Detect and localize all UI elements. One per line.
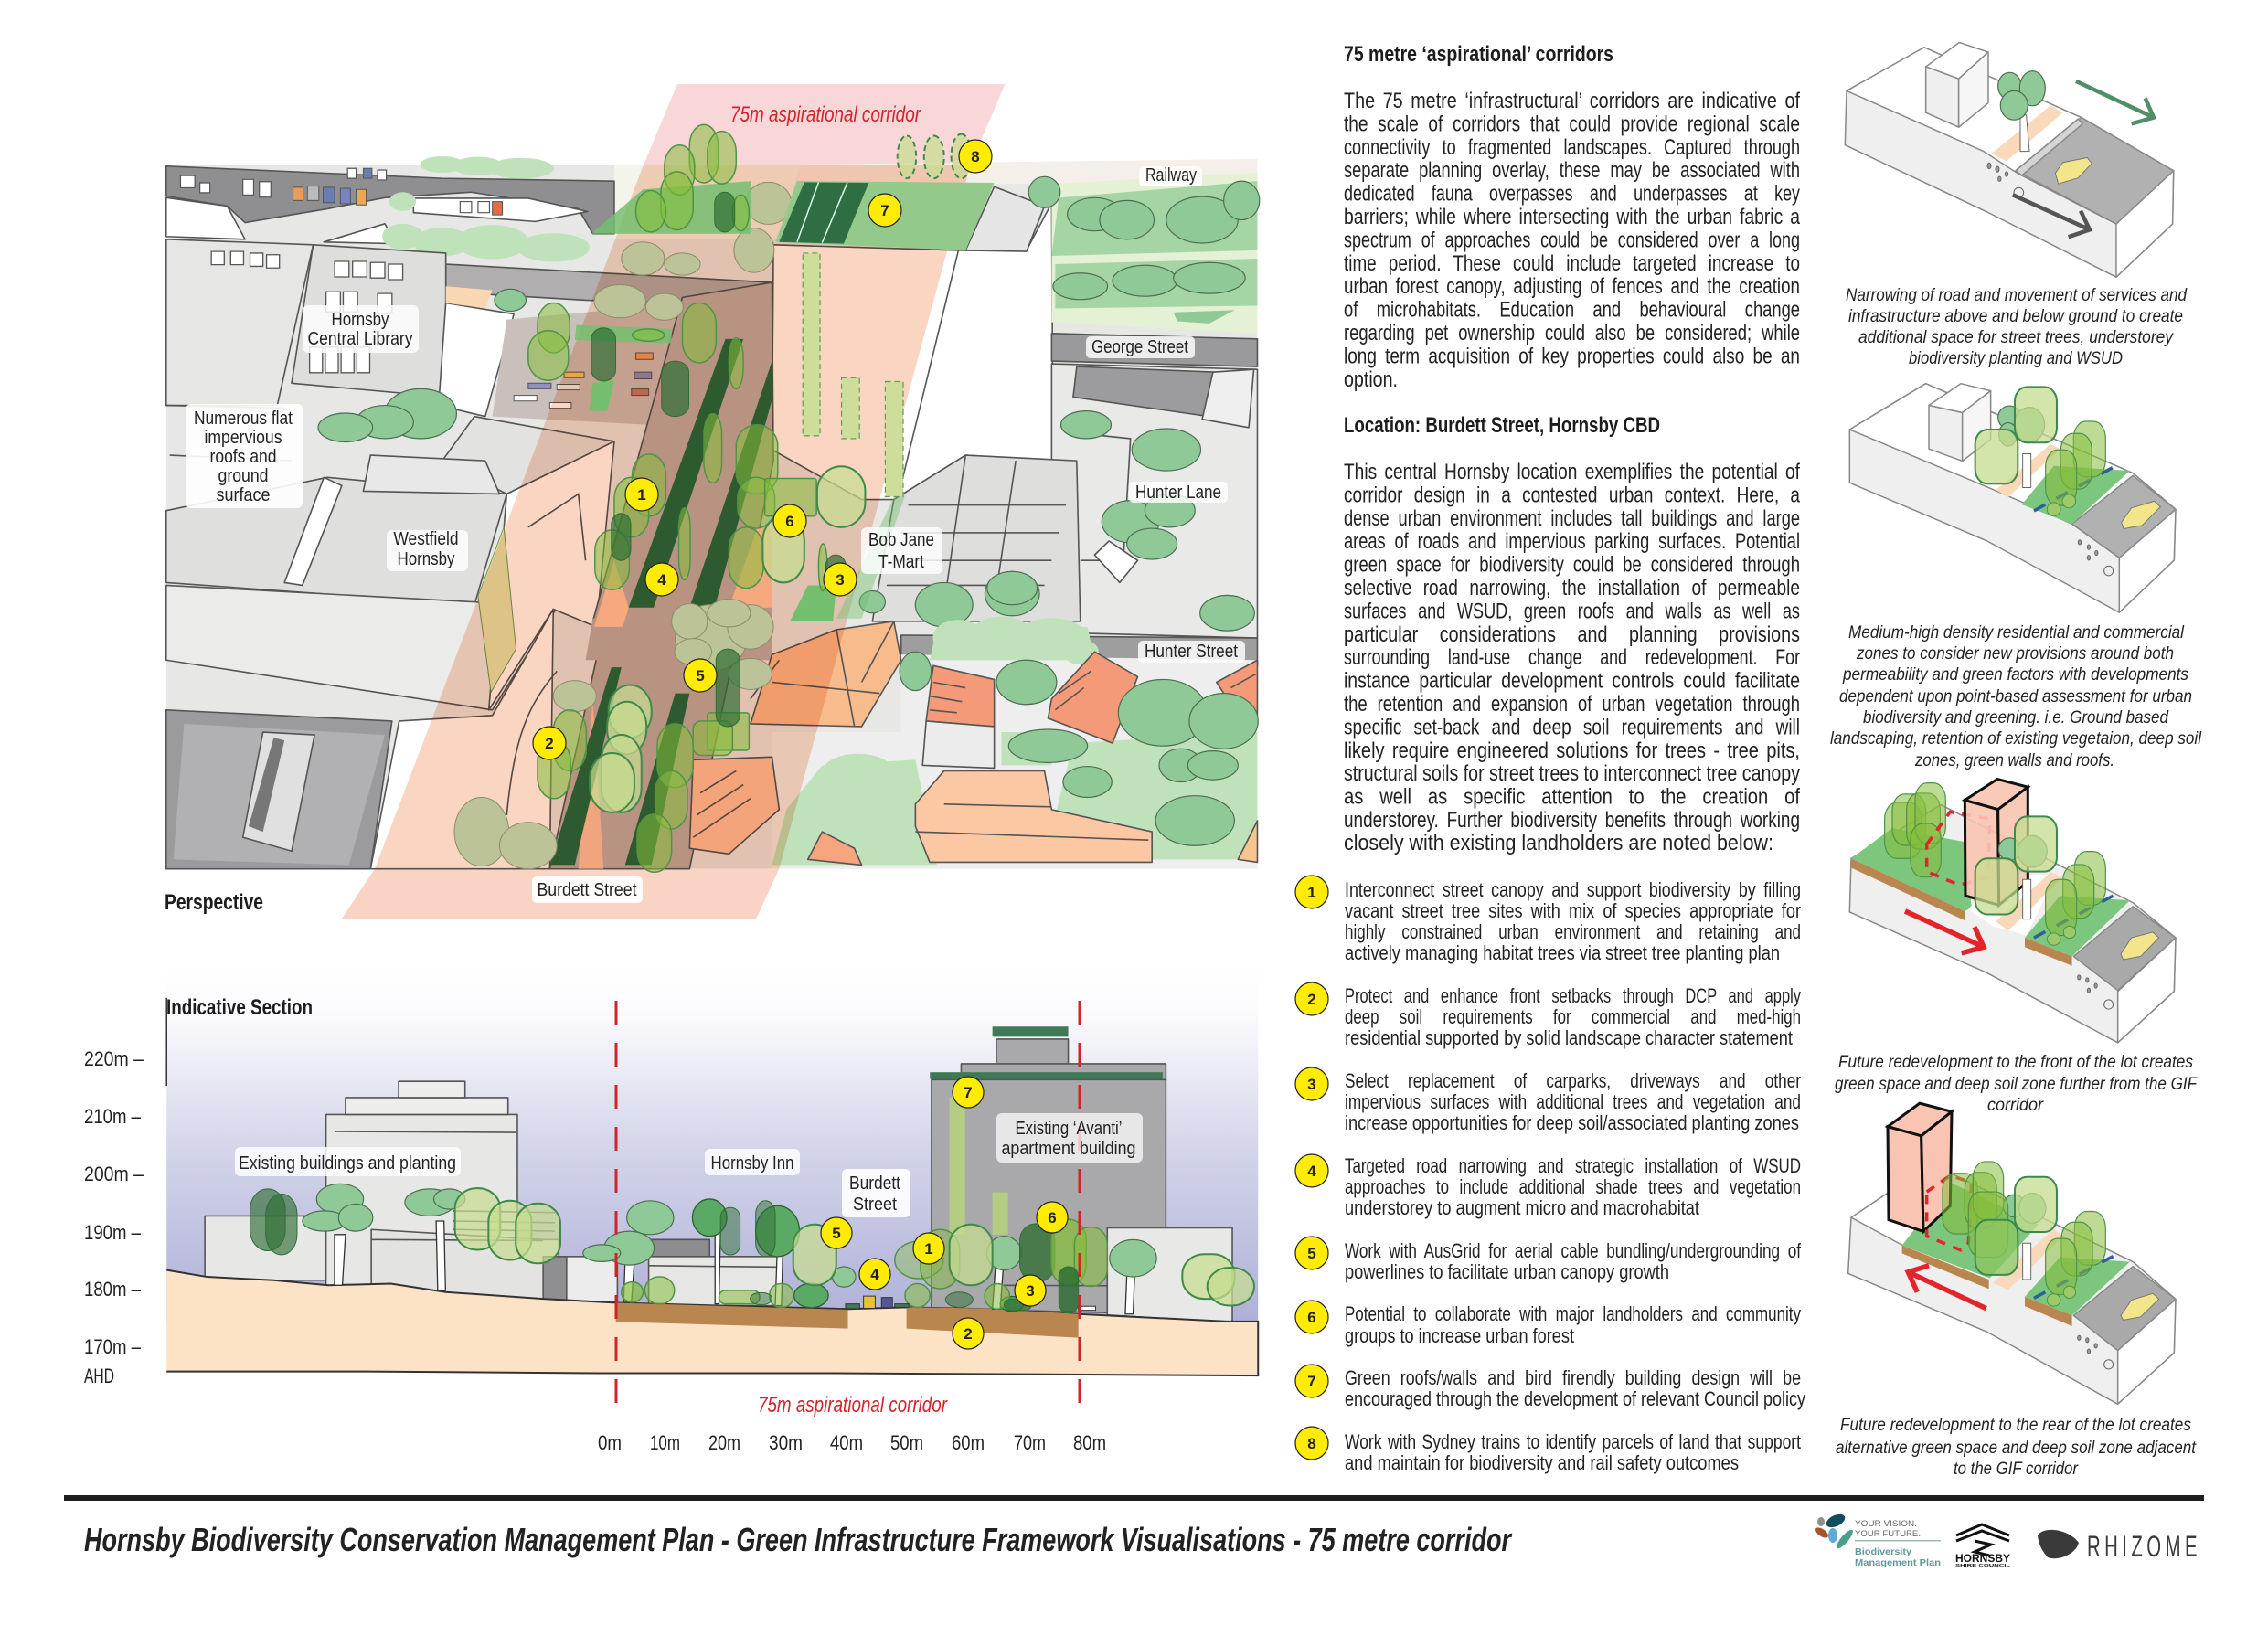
tree [1998,835,2047,919]
caption 3 [1835,1053,2198,1115]
text: aspirational corridors paragraph: the scale of corridors that could provide regional scale [1344,112,1800,136]
label: Avanti: Existing ‘Avanti’ [1015,1119,1123,1139]
caption 2: landscaping, retention of existing vegetaion, deep soil [1830,729,2202,749]
action 1: 1 [1307,884,1316,901]
text: location paragraph: instance particular development controls could facilitate [1344,669,1800,694]
text: location paragraph: understorey. Further biodiversity benefits through working [1344,808,1800,833]
numbered markers on perspective: 4 [657,571,666,589]
label: flat roofs: roofs and [210,447,276,467]
section tree canopies [303,1184,1156,1287]
block [1849,805,2176,1043]
text: aspirational corridors heading: 75 metre ‘aspirational’ corridors [1344,42,1613,67]
left edge line [165,998,167,1086]
swale dashes [2034,467,2114,511]
footpath [1993,1229,2063,1290]
text: aspirational corridors paragraph: of microhabitats. Education and behavioural change [1344,298,1800,323]
numbered markers on perspective: 6 [785,513,794,530]
block [1845,48,2174,277]
label: Hornsby Inn: Hornsby Inn [711,1153,793,1174]
section artwork [166,964,1258,1375]
text: location paragraph: closely with existing landholders are noted below: [1344,831,1773,855]
left gray roof block [166,239,314,537]
peach corridor building [772,245,958,500]
distance axis: 20m [708,1431,740,1454]
canopy capsules [1975,816,2105,945]
diagram 3 drawing [1849,780,2176,1043]
numbered markers on perspective: 2 [545,735,554,752]
label: existing buildings [235,1147,461,1176]
caption 1: biodiversity planting and WSUD [1909,349,2123,368]
road surface [2016,118,2174,224]
street bins and car [846,1296,1095,1311]
tree [1998,406,2045,488]
white building and carpark [439,286,700,494]
distance axis: 0m [598,1431,622,1454]
list: numbered actions [1295,876,1805,1474]
action 1: actively managing habitat trees via street tree planting plan [1345,941,1780,964]
text: location paragraph: likely require engineered solutions for trees - tree pits, [1344,738,1800,763]
road [2073,1267,2176,1351]
numbered markers on perspective: 3 [836,571,845,589]
elevation axis: 180m – [84,1278,142,1301]
label: flat roofs [186,404,303,508]
text: aspirational corridors paragraph: connectivity to fragmented landscapes. Captured through [1344,135,1800,160]
action 5: 5 [1307,1245,1316,1262]
distance axis: 70m [1014,1431,1046,1454]
action 4: 4 [1307,1163,1316,1180]
heading: Perspective: Perspective [165,890,263,915]
action 4 [1295,1154,1801,1219]
text: aspirational corridors paragraph: dedicated fauna overpasses and underpasses at key [1344,182,1800,207]
label: Burdett Street section: Burdett [849,1174,900,1194]
canopy capsules [1943,1162,2105,1306]
action 2: Protect and enhance front setbacks through DCP and apply [1345,984,1801,1007]
building [1929,384,1991,461]
car [2055,157,2092,184]
label: corridor: 75m aspirational corridor [730,102,921,127]
action 2 [1295,982,1801,1049]
text: aspirational corridors paragraph: option. [1344,367,1398,392]
front verge [2025,1258,2130,1315]
bottom left parking [166,710,392,869]
caption 3: green space and deep soil zone further from the GIF [1835,1075,2198,1094]
action 2: deep soil requirements for commercial and med-high [1345,1005,1801,1028]
hedge and upper planting [383,193,590,261]
caption 4: to the GIF corridor [1954,1460,2079,1479]
caption 4 [1836,1416,2197,1479]
text: aspirational corridors paragraph: spectrum of approaches could be considered over a long [1344,228,1800,252]
street verge planting strips [549,339,772,865]
numbered markers on section [821,1077,1068,1349]
old building footprint [1927,812,1990,885]
white yard [1968,875,2057,935]
dark green section trees [692,1199,1024,1312]
numbered markers on section: 1 [924,1240,933,1258]
diagram 4: redevelopment to rear of lot [1836,1103,2197,1479]
library roof [211,245,446,397]
right low building [1107,1227,1232,1322]
carpark road band [446,264,772,303]
top railway and road [166,156,1257,244]
mid-ground tree [318,289,526,442]
services [1987,163,2024,197]
label: Burdett Street [532,876,643,903]
caption 2: Medium-high density residential and commercial [1848,623,2185,643]
footpath [1991,105,2063,161]
logo: Rhizome: RHIZOME [2087,1530,2201,1563]
text: location paragraph: This central Hornsby location exemplifies the potential of [1344,460,1800,484]
footer title: Hornsby Biodiversity Conservation Management Plan - Green Infrastructure Framework Visualisations - 75 metre corridor [84,1521,1512,1558]
action 3: 3 [1307,1076,1316,1093]
logo: Hornsby Shire Council [1955,1524,2010,1567]
numbered markers on perspective: 7 [880,202,889,219]
action 5 [1295,1237,1802,1283]
panel: indicative section [84,964,1258,1454]
label: Burdett Street: Burdett Street [538,880,637,900]
logo: biodiversity plan: YOUR FUTURE. [1855,1529,1921,1538]
distance axis: 40m [830,1431,863,1454]
label: corridor on section: 75m aspirational corridor [758,1393,948,1418]
numbered markers on section: 3 [1026,1282,1035,1300]
logo: biodiversity plan [1814,1512,1941,1568]
action 5: Work with AusGrid for aerial cable bundling/undergrounding of [1345,1239,1802,1262]
Westfield roofs [166,441,614,869]
building [1926,42,1988,127]
logo: Rhizome [2038,1530,2201,1563]
services [2078,540,2114,576]
numbered markers on perspective [533,140,992,759]
action 4: approaches to include additional shade trees and vegetation [1345,1175,1801,1198]
numbered markers on section: 6 [1048,1209,1057,1227]
sky [166,964,1258,1322]
elevation axis: 220m – [84,1047,144,1070]
action 8: and maintain for biodiversity and rail safety outcomes [1345,1451,1739,1474]
right tall white building [894,203,1053,500]
left buildings [205,1081,617,1302]
caption 1: additional space for street trees, understorey [1858,328,2174,347]
rear green space [1851,828,1972,911]
caption 2: permeability and green factors with developments [1842,665,2188,685]
residential lots [772,617,1257,869]
elevation axis: 210m – [84,1105,142,1128]
block [1849,384,2176,612]
corridor overlay [375,165,971,869]
olive canopy trees [454,182,792,869]
george street and right buildings [872,334,1257,638]
car [2122,501,2160,529]
distance axis [598,1431,1106,1454]
action 3: impervious surfaces with additional trees and vegetation and [1345,1090,1801,1113]
logo: biodiversity plan: YOUR VISION. [1855,1519,1917,1528]
text: location paragraph [1344,460,1801,855]
Avanti apartment building [930,1026,1166,1314]
label: existing buildings: Existing buildings and planting [239,1153,456,1174]
proposed green wall strips [803,253,903,497]
distance axis: 10m [650,1431,680,1454]
action 2: residential supported by solid landscape character statement [1345,1026,1793,1049]
action 6: groups to increase urban forest [1345,1324,1574,1347]
action 7: 7 [1307,1373,1316,1390]
footer rule [64,1495,2204,1501]
diagram 4 drawing [1848,1103,2176,1404]
numbered markers on perspective: 8 [971,148,980,165]
caption 4: alternative green space and deep soil zone adjacent [1836,1439,2197,1458]
text: location paragraph: the retention and expansion of urban vegetation through [1344,692,1800,717]
action 2: 2 [1307,991,1316,1008]
caption 3: Future redevelopment to the front of the lot creates [1838,1053,2193,1072]
caption 2 [1830,623,2202,770]
label: flat roofs: impervious [205,428,282,448]
logo: Hornsby Shire Council: HORNSBY [1955,1552,2010,1565]
distance axis: 80m [1073,1431,1106,1454]
label: flat roofs: ground [218,466,269,486]
numbered markers on section: 7 [964,1084,973,1101]
elevation axis: AHD [84,1365,114,1387]
caption 1: infrastructure above and below ground to create [1848,307,2183,326]
text: aspirational corridors paragraph: long term acquisition of key properties could also be an [1344,344,1800,368]
diagram 2 drawing [1849,384,2176,612]
action 1: highly constrained urban environment and retaining and [1345,920,1801,943]
text: location paragraph: surfaces and WSUD, green roofs and walls as well as [1344,599,1800,623]
arrow: green [2076,81,2154,123]
action 1: Interconnect street canopy and support biodiversity by filling [1345,878,1801,901]
tree trunks [335,1221,1134,1314]
soil edge [1851,858,1965,920]
green space [1902,1183,2039,1278]
logo: biodiversity plan: Management Plan [1855,1558,1941,1568]
ground [166,1270,1258,1375]
label: Westfield [387,529,468,571]
text: location heading: Location: Burdett Street, Hornsby CBD [1344,413,1660,438]
action 6 [1295,1301,1801,1347]
label: Burdett Street section [842,1169,910,1217]
label: Hunter Lane: Hunter Lane [1135,483,1221,503]
numbered markers on perspective: 5 [696,667,705,685]
label: Bob Jane [861,527,942,574]
road [2072,475,2176,558]
action 8 [1295,1427,1801,1474]
text: aspirational corridors paragraph [1344,89,1801,392]
proposed street tree canopies [528,124,865,872]
hunter street [901,635,1257,665]
action 3: Select replacement of carparks, driveways and other [1345,1069,1801,1092]
action 8: Work with Sydney trains to identify parcels of land that support [1345,1430,1801,1453]
action 4: understorey to augment micro and macrohabitat [1345,1196,1699,1219]
diagram 1: road narrowing [1845,42,2188,368]
label: Westfield: Westfield [393,529,459,549]
Hornsby Inn building [649,1239,778,1305]
distance axis: 50m [890,1431,923,1454]
caption 2: zones to consider new provisions around both [1856,644,2174,664]
car [2121,1293,2159,1320]
numbered markers on section: 4 [870,1266,879,1283]
green roof and dark stripes [775,181,995,250]
heading: Indicative Section: Indicative Section [166,995,313,1020]
elevation axis: 200m – [84,1163,144,1185]
text: location paragraph: selective road narrowing, the installation of permeable [1344,576,1800,600]
services [2078,975,2114,1009]
text: location paragraph: specific set-back and deep soil requirements and will [1344,715,1800,739]
label: Bob Jane: T-Mart [878,552,924,572]
text: aspirational corridors paragraph: barriers; while where intersecting with the urban fabric a [1344,205,1801,229]
old building footprint [1927,1175,1972,1250]
canopy capsules [1975,387,2105,516]
label: Westfield: Hornsby [397,549,455,569]
action 4: Targeted road narrowing and strategic installation of WSUD [1345,1154,1801,1177]
text: aspirational corridors paragraph: urban forest canopy, adjusting of fences and the creation [1344,274,1800,299]
elevation axis [84,1047,144,1387]
text: location paragraph: areas of roads and impervious parking surfaces. Potential [1344,529,1800,554]
diagram 3: redevelopment to front of lot [1835,780,2198,1115]
action 7: encouraged through the development of relevant Council policy [1345,1387,1805,1410]
text: location paragraph: surrounding land-use change and redevelopment. For [1344,645,1800,670]
distance axis: 30m [769,1431,803,1454]
label: Burdett Street section: Street [853,1195,897,1215]
front verge [2025,896,2130,956]
label: Hornsby Inn [705,1149,800,1175]
rear capsules [1885,783,1945,877]
text: location paragraph: green space for biodiversity could be considered through [1344,553,1800,578]
distance axis: 60m [952,1431,985,1454]
logo: Hornsby Shire Council: SHIRE COUNCIL [1955,1563,2010,1567]
text: location paragraph: particular considerations and planning provisions [1344,622,1800,647]
arrow: grey [2013,195,2090,237]
arrow: red forward [1905,911,1984,953]
action 3 [1295,1067,1801,1134]
houses [689,621,1257,865]
action 6: 6 [1307,1309,1316,1326]
label: library: Central Library [307,329,413,349]
car [2121,932,2159,960]
label: Railway: Railway [1145,165,1197,186]
services [2078,1335,2114,1369]
footpath [1996,444,2060,497]
action 7: Green roofs/walls and bird firendly building design will be [1345,1366,1801,1389]
text: location paragraph: structural soils for street trees to interconnect tree canopy [1344,761,1800,786]
caption 1: Narrowing of road and movement of services and [1846,286,2188,305]
arrow: red backward [1908,1266,1986,1309]
numbered markers on perspective: 1 [637,486,646,504]
action 8: 8 [1307,1435,1316,1452]
text: aspirational corridors paragraph: separate planning overlay, these may be associated with [1344,158,1800,183]
text: location paragraph: as well as specific attention to the creation of [1344,785,1800,810]
footpath [1996,873,2063,930]
numbered markers on section: 5 [832,1225,841,1242]
action 1: vacant street tree sites with mix of species appropriate for [1345,899,1801,922]
text: aspirational corridors paragraph: The 75 metre ‘infrastructural’ corridors are indicative of [1344,89,1800,113]
perspective scene artwork [166,84,1260,919]
label: flat roofs: Numerous flat [194,409,293,429]
label: flat roofs: surface [216,485,271,505]
text: location paragraph: corridor design in a contested urban context. Here, a [1344,483,1801,507]
new building [1888,1103,1952,1231]
action 1 [1295,876,1801,964]
label: Bob Jane: Bob Jane [868,530,934,550]
numbered markers on section: 2 [964,1325,973,1343]
diagram 1 drawing [1845,42,2174,277]
corridor dashed limits [616,1001,1080,1413]
corridor band above and below scene [342,84,1005,919]
scene base [166,165,1257,869]
action 5: powerlines to facilitate urban canopy growth [1345,1260,1669,1283]
label: Avanti [996,1113,1143,1163]
action 7 [1295,1365,1805,1410]
label: library [303,305,419,353]
caption 2: biodiversity and greening. i.e. Ground based [1863,708,2169,728]
caption 2: dependent upon point-based assessment for urban [1839,687,2192,706]
caption 1 [1846,286,2188,368]
proposed planting capsules [250,1188,1254,1313]
diagram 2: residential and commercial zones [1830,384,2202,770]
label: George Street: George Street [1091,337,1188,357]
label: library: Hornsby [331,310,389,330]
vegetation top right [1028,173,1260,334]
label: Hunter Street: Hunter Street [1145,642,1238,662]
tree [2003,1194,2046,1280]
text: location paragraph: dense urban environment includes tall buildings and large [1344,506,1800,531]
elevation axis: 190m – [84,1221,142,1244]
action 6: Potential to collaborate with major landholders and community [1345,1302,1801,1325]
green verge [2022,466,2130,524]
road [2073,907,2176,991]
action 3: increase opportunities for deep soil/associated planting zones [1345,1111,1799,1134]
label: Avanti: apartment building [1002,1139,1135,1159]
block [1848,1169,2176,1404]
tree [1998,71,2045,152]
elevation axis: 170m – [84,1335,142,1358]
caption 3: corridor [1987,1096,2044,1115]
new building [1965,780,2028,905]
text: aspirational corridors paragraph: regarding pet ownership could also be considered; while [1344,321,1800,345]
caption 2: zones, green walls and roofs. [1914,751,2114,770]
deep soil zones [616,1303,1079,1338]
text: aspirational corridors paragraph: time period. These could include targeted increase to [1344,251,1800,276]
street [549,282,773,869]
residential tree canopies [859,571,1258,845]
panel: perspective illustration [166,84,1260,919]
logo: biodiversity plan: Biodiversity [1855,1547,1911,1557]
rail corridor proposed planting [898,134,972,178]
ground planting beds [575,181,905,621]
caption 4: Future redevelopment to the rear of the lot creates [1840,1416,2191,1435]
